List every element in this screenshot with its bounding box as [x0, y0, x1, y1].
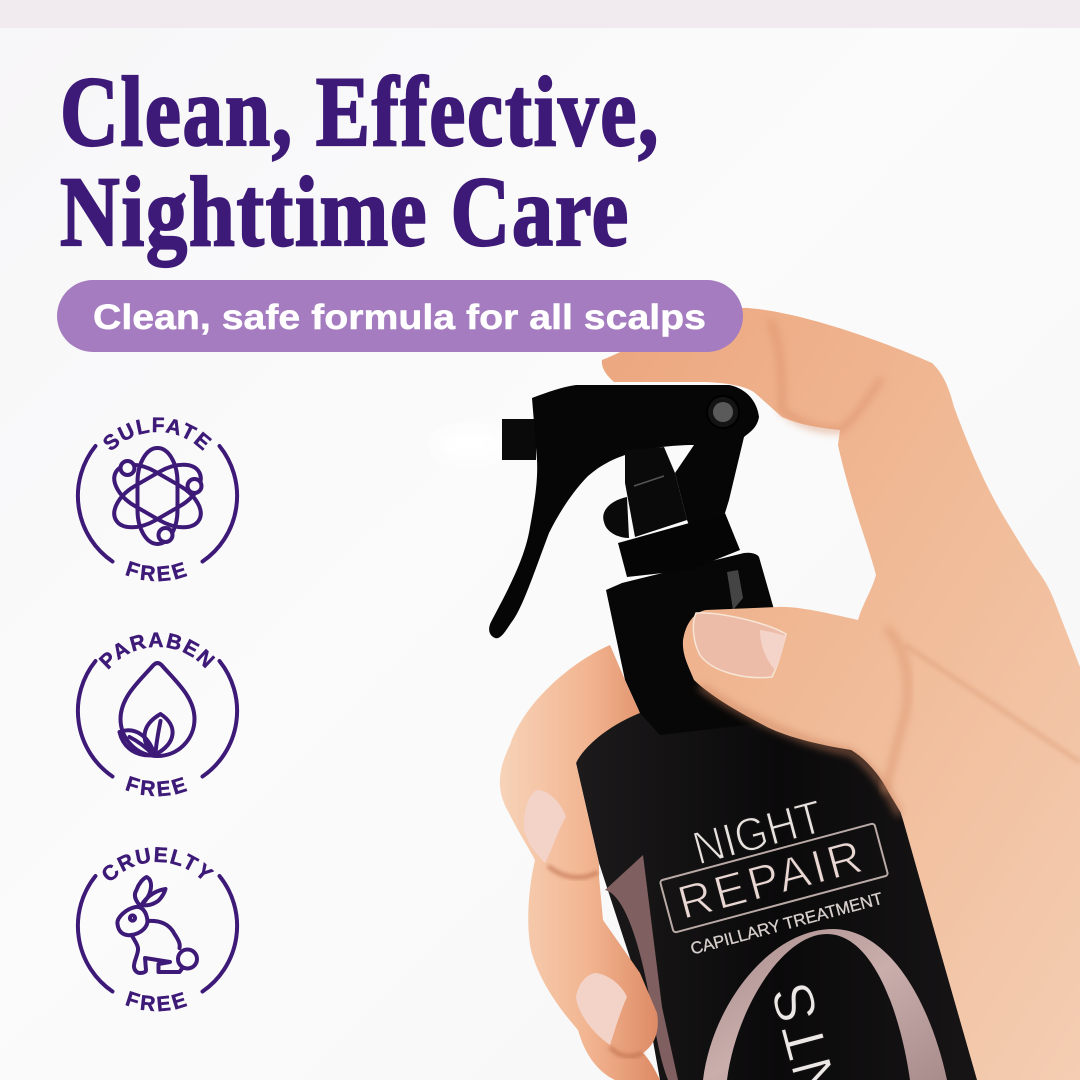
thumb crease — [885, 628, 908, 792]
title — [60, 56, 660, 267]
label: free: FREE — [126, 776, 188, 796]
fingers shape — [500, 645, 660, 1080]
bottle label: REPAIR: REPAIR — [672, 829, 867, 929]
top strip — [0, 0, 1080, 28]
sprayer pivot — [707, 396, 739, 428]
nail: ring finger — [576, 973, 627, 1045]
bottle neck — [606, 553, 790, 735]
bottle label: capillary treatment: CAPILLARY TREATMENT — [688, 889, 885, 958]
lower finger separation — [610, 1047, 643, 1056]
spray mist — [435, 431, 505, 459]
sprayer nozzle — [502, 419, 536, 460]
pill text: Clean, safe formula for all scalps — [93, 298, 706, 337]
sprayer trigger head — [489, 385, 759, 638]
bottle neck highlight — [727, 570, 743, 610]
rose ring logo — [703, 929, 947, 1080]
bottle label: REPAIR box — [660, 823, 888, 933]
icon: drop with leaves — [120, 663, 194, 756]
left rose label band — [605, 855, 678, 1080]
label: paraben: PARABEN — [98, 632, 216, 670]
finger separation shadow — [548, 866, 598, 877]
nail: thumb — [693, 613, 786, 678]
back hand fingers — [500, 645, 660, 1080]
ring arcs — [78, 446, 237, 562]
label: free: FREE — [126, 561, 188, 582]
badge: cruelty free — [76, 847, 240, 1012]
title line 1: Clean, Effective, — [60, 56, 660, 167]
icon: rabbit — [117, 877, 197, 973]
shading under index finger — [770, 320, 882, 430]
subtitle pill — [57, 280, 743, 352]
pill background — [57, 280, 743, 352]
sprayer rear knob — [603, 497, 629, 538]
sprayer collar — [618, 513, 740, 577]
bottle label: NIGHT: NIGHT — [687, 789, 828, 875]
bottle body — [576, 710, 980, 1080]
main hand with index finger and thumb — [602, 308, 1080, 1080]
shading under thumb — [700, 686, 900, 815]
icon: atom — [106, 448, 209, 544]
nail: middle finger — [524, 790, 566, 863]
ring arcs — [78, 661, 237, 776]
photo: hand holding spray bottle — [489, 308, 1080, 1080]
palm crease — [905, 645, 1080, 762]
sprayer stem glint — [634, 476, 664, 486]
label: sulfate: SULFATE — [104, 417, 212, 451]
badge: sulfate free — [76, 417, 240, 582]
label: free: FREE — [126, 991, 188, 1012]
label: cruelty: CRUELTY — [102, 847, 214, 880]
nail lunula — [760, 630, 786, 670]
title line 2: Nighttime Care — [60, 156, 630, 267]
badge: paraben free — [76, 632, 240, 796]
sprayer pivot cap — [713, 402, 733, 422]
sprayer stem — [625, 447, 687, 537]
ring arcs — [78, 876, 237, 992]
